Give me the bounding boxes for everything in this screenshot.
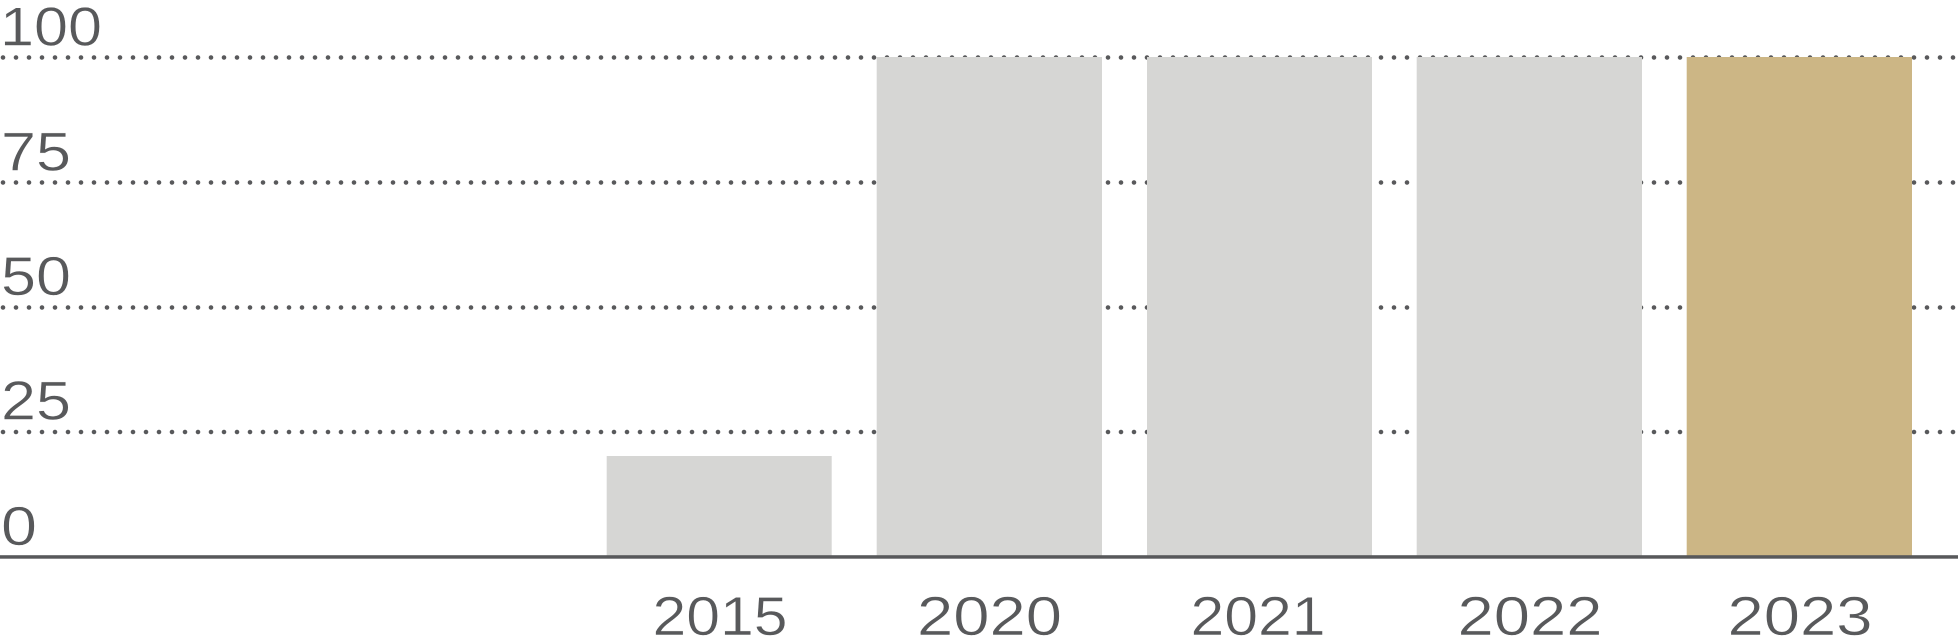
bar: 2023 highlighted (1687, 57, 1912, 557)
y-axis labels: 75 (1, 120, 71, 182)
bar: 2021 (1147, 57, 1372, 557)
y-axis labels: 25 (1, 370, 71, 432)
bar: 2020 (877, 57, 1102, 557)
y-axis labels (0, 0, 102, 557)
gridlines (3, 58, 1958, 432)
bar: 2015 (607, 456, 832, 557)
y-axis labels: 0 (1, 495, 37, 557)
x-axis year labels (652, 585, 1872, 639)
y-axis labels: 50 (1, 245, 71, 307)
bar: 2022 (1417, 57, 1642, 557)
x-axis baseline (0, 555, 1958, 559)
